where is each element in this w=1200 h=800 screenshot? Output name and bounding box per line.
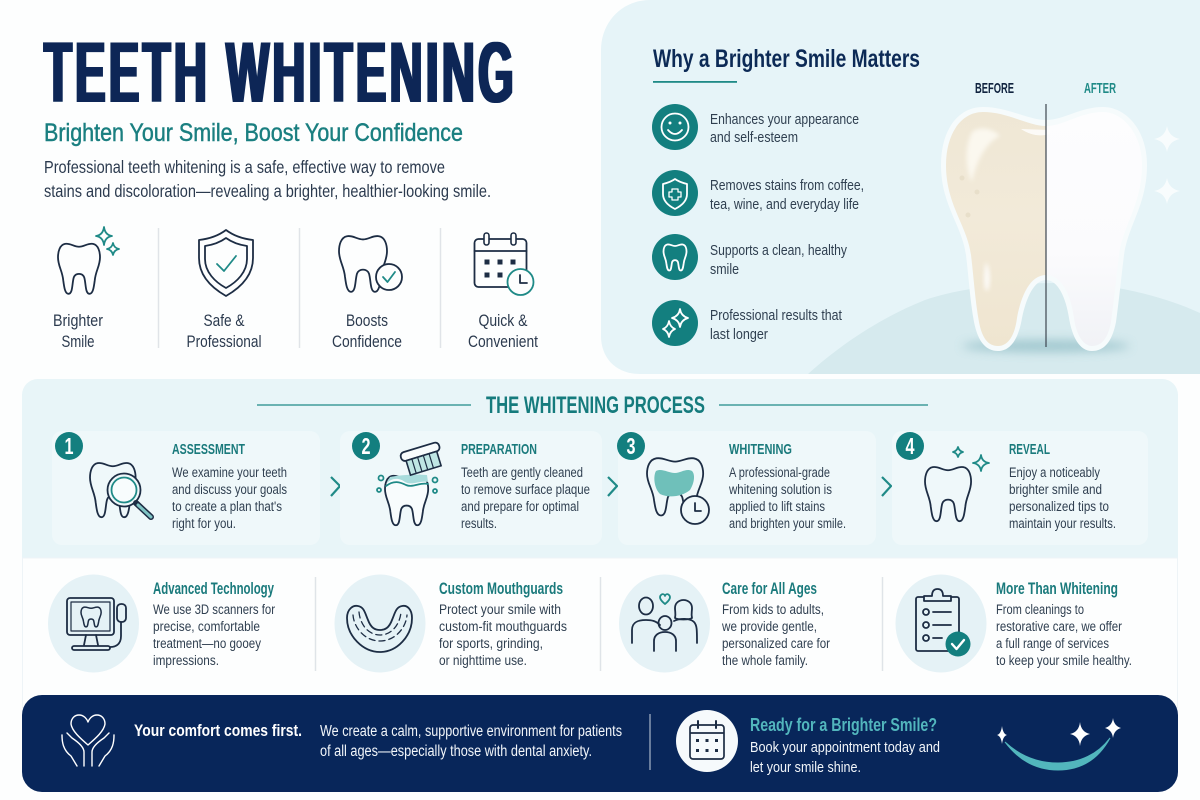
- icon: shield with plus: [652, 170, 698, 216]
- benefit: safe and professional: Safe &: [204, 311, 245, 330]
- step 1: assessment: We examine your teeth: [172, 465, 287, 480]
- intro text: [44, 157, 491, 201]
- step 4: reveal: Enjoy a noticeably: [1009, 465, 1100, 480]
- step 2: preparation: [340, 431, 602, 545]
- step 3: whitening: whitening solution is: [728, 482, 832, 497]
- step 3: whitening: [617, 431, 876, 545]
- call to action heading: Ready for a Brighter Smile?: [750, 714, 937, 735]
- reason: clean and healthy: smile: [710, 262, 739, 278]
- arrow: [331, 477, 340, 496]
- reason: appearance: and self-esteem: [710, 130, 798, 146]
- icon: calendar with clock: [474, 233, 534, 295]
- reason: lasting results: [652, 300, 842, 346]
- step 1: assessment: to create a plan that's: [172, 499, 282, 514]
- benefit: brighter smile: Brighter: [53, 311, 103, 330]
- feature: custom mouthguards: or nighttime use.: [439, 653, 527, 668]
- feature: advanced technology: impressions.: [153, 653, 219, 668]
- benefit: safe and professional: Professional: [186, 332, 262, 351]
- icon: tooth with magnifier: [90, 463, 151, 517]
- feature: more than whitening: [896, 574, 1132, 672]
- step 4: reveal: personalized tips to: [1009, 499, 1109, 514]
- step 3: whitening: WHITENING: [729, 441, 792, 458]
- after label: AFTER: [1084, 80, 1116, 97]
- step 4: reveal: maintain your results.: [1009, 516, 1116, 531]
- feature: advanced technology: We use 3D scanners for: [153, 602, 275, 617]
- icon: tooth with check badge: [339, 236, 402, 292]
- icon: tooth and toothbrush: [377, 442, 445, 525]
- step 2: preparation: PREPARATION: [461, 441, 537, 458]
- feature: custom mouthguards: [334, 574, 567, 672]
- title: TEETH WHITENING: [44, 25, 517, 121]
- step 1: assessment: ASSESSMENT: [172, 441, 245, 458]
- step 2: preparation: to remove surface plaque: [461, 482, 590, 497]
- icon: tooth with sparkles: [58, 227, 119, 294]
- icon: smiley: [652, 104, 698, 150]
- number badge: [896, 432, 924, 460]
- step 4: reveal: REVEAL: [1009, 441, 1050, 458]
- intro text: stains and discoloration—revealing a brighter, healthier-looking smile.: [44, 181, 491, 201]
- call to action text: [750, 739, 940, 776]
- step 2: preparation: and prepare for optimal: [461, 499, 579, 514]
- reason: appearance: Enhances your appearance: [710, 112, 859, 128]
- number badge: [617, 432, 645, 460]
- arrow: [882, 477, 891, 496]
- subtitle: Brighten Your Smile, Boost Your Confidence: [44, 119, 463, 147]
- number badge: [352, 432, 380, 460]
- icon: tooth: [652, 234, 698, 280]
- comfort text: [320, 723, 622, 760]
- step 4: reveal: [892, 431, 1148, 545]
- icon: shield with check: [199, 230, 253, 296]
- benefit: brighter smile: Smile: [62, 332, 94, 351]
- call to action text: Book your appointment today and: [750, 739, 940, 756]
- icon: tooth with sparkles: [925, 447, 989, 521]
- heading: THE WHITENING PROCESS: [486, 392, 705, 419]
- feature: advanced technology: treatment—no gooey: [153, 636, 261, 651]
- reason: appearance: [652, 104, 859, 150]
- step 3: whitening: A professional-grade: [729, 465, 830, 480]
- comfort text: of all ages—especially those with dental anxiety.: [320, 743, 592, 760]
- number badge: 2: [362, 433, 370, 459]
- feature: more than whitening: More Than Whitening: [996, 580, 1118, 598]
- benefit: quick and convenient: Quick &: [478, 311, 528, 330]
- feature: care for all ages: personalized care for: [722, 636, 830, 651]
- feature: custom mouthguards: custom-fit mouthguards: [439, 619, 567, 634]
- icon: sparkles: [1154, 126, 1180, 204]
- step 1: assessment: right for you.: [172, 516, 236, 531]
- icon: mouthguard: [334, 574, 426, 672]
- icon: sparkles: [652, 300, 698, 346]
- number badge: 4: [906, 433, 915, 459]
- feature: more than whitening: to keep your smile healthy.: [996, 653, 1132, 668]
- reason: lasting results: Professional results that: [710, 308, 842, 324]
- benefit: boosts confidence: Confidence: [332, 332, 402, 351]
- feature: advanced technology: [48, 574, 275, 672]
- feature: care for all ages: the whole family.: [722, 653, 808, 668]
- reason: stains: tea, wine, and everyday life: [710, 197, 859, 213]
- icon: hands holding heart: [62, 715, 114, 766]
- benefit: brighter smile: [53, 227, 119, 351]
- benefit: boosts confidence: Boosts: [346, 311, 388, 330]
- feature: custom mouthguards: Custom Mouthguards: [439, 580, 563, 598]
- benefit: quick and convenient: Convenient: [468, 332, 538, 351]
- step 1: assessment: and discuss your goals: [172, 482, 287, 497]
- feature: more than whitening: From cleanings to: [996, 602, 1084, 617]
- step 3: whitening: and brighten your smile.: [729, 516, 846, 531]
- call to action text: let your smile shine.: [750, 759, 861, 776]
- benefit: boosts confidence: [332, 236, 402, 351]
- feature: care for all ages: we provide gentle,: [721, 619, 817, 634]
- heading: Why a Brighter Smile Matters: [653, 45, 920, 73]
- step 3: whitening: applied to lift stains: [729, 499, 825, 514]
- banner: comfort and call to action: [22, 695, 1178, 792]
- icon: tooth with whitening tray and clock: [647, 458, 709, 524]
- arrow: [608, 477, 617, 496]
- intro text: Professional teeth whitening is a safe, effective way to remove: [44, 157, 445, 177]
- icon: family with heart: [619, 574, 710, 672]
- reason: stains: [652, 170, 864, 216]
- number badge: [55, 432, 83, 460]
- step 2: preparation: results.: [461, 516, 497, 531]
- step 2: preparation: Teeth are gently cleaned: [461, 465, 583, 480]
- step 4: reveal: brighter smile and: [1009, 482, 1102, 497]
- feature: advanced technology: Advanced Technology: [153, 580, 275, 598]
- feature: care for all ages: From kids to adults,: [722, 602, 824, 617]
- step 1: assessment: [52, 431, 320, 545]
- reason: clean and healthy: [652, 234, 848, 280]
- before label: BEFORE: [975, 80, 1014, 97]
- panel: whitening process: [22, 379, 1178, 708]
- feature: care for all ages: [619, 574, 830, 672]
- reason: stains: Removes stains from coffee,: [710, 178, 864, 194]
- icon: calendar: [676, 710, 738, 772]
- icon: clipboard with check: [896, 574, 986, 672]
- reason: lasting results: last longer: [710, 327, 768, 343]
- feature: custom mouthguards: Protect your smile with: [439, 602, 561, 617]
- comfort text: We create a calm, supportive environment for patients: [320, 723, 622, 740]
- comfort heading: Your comfort comes first.: [134, 721, 302, 740]
- number badge: 1: [64, 433, 74, 459]
- panel: why a brighter smile matters: [601, 0, 1200, 374]
- feature: custom mouthguards: for sports, grinding,: [439, 636, 543, 651]
- icon: 3D scanner: [48, 574, 139, 672]
- benefit: quick and convenient: [468, 233, 538, 351]
- number badge: 3: [626, 433, 636, 459]
- benefit: safe and professional: [186, 230, 262, 351]
- icon: smile with sparkles: [997, 718, 1121, 770]
- feature: more than whitening: restorative care, we offer: [996, 619, 1122, 634]
- feature: more than whitening: a full range of services: [996, 636, 1109, 651]
- reason: clean and healthy: Supports a clean, healthy: [710, 243, 848, 259]
- feature: care for all ages: Care for All Ages: [722, 580, 817, 598]
- feature: advanced technology: precise, comfortable: [153, 619, 260, 634]
- tooth before and after: [941, 104, 1180, 352]
